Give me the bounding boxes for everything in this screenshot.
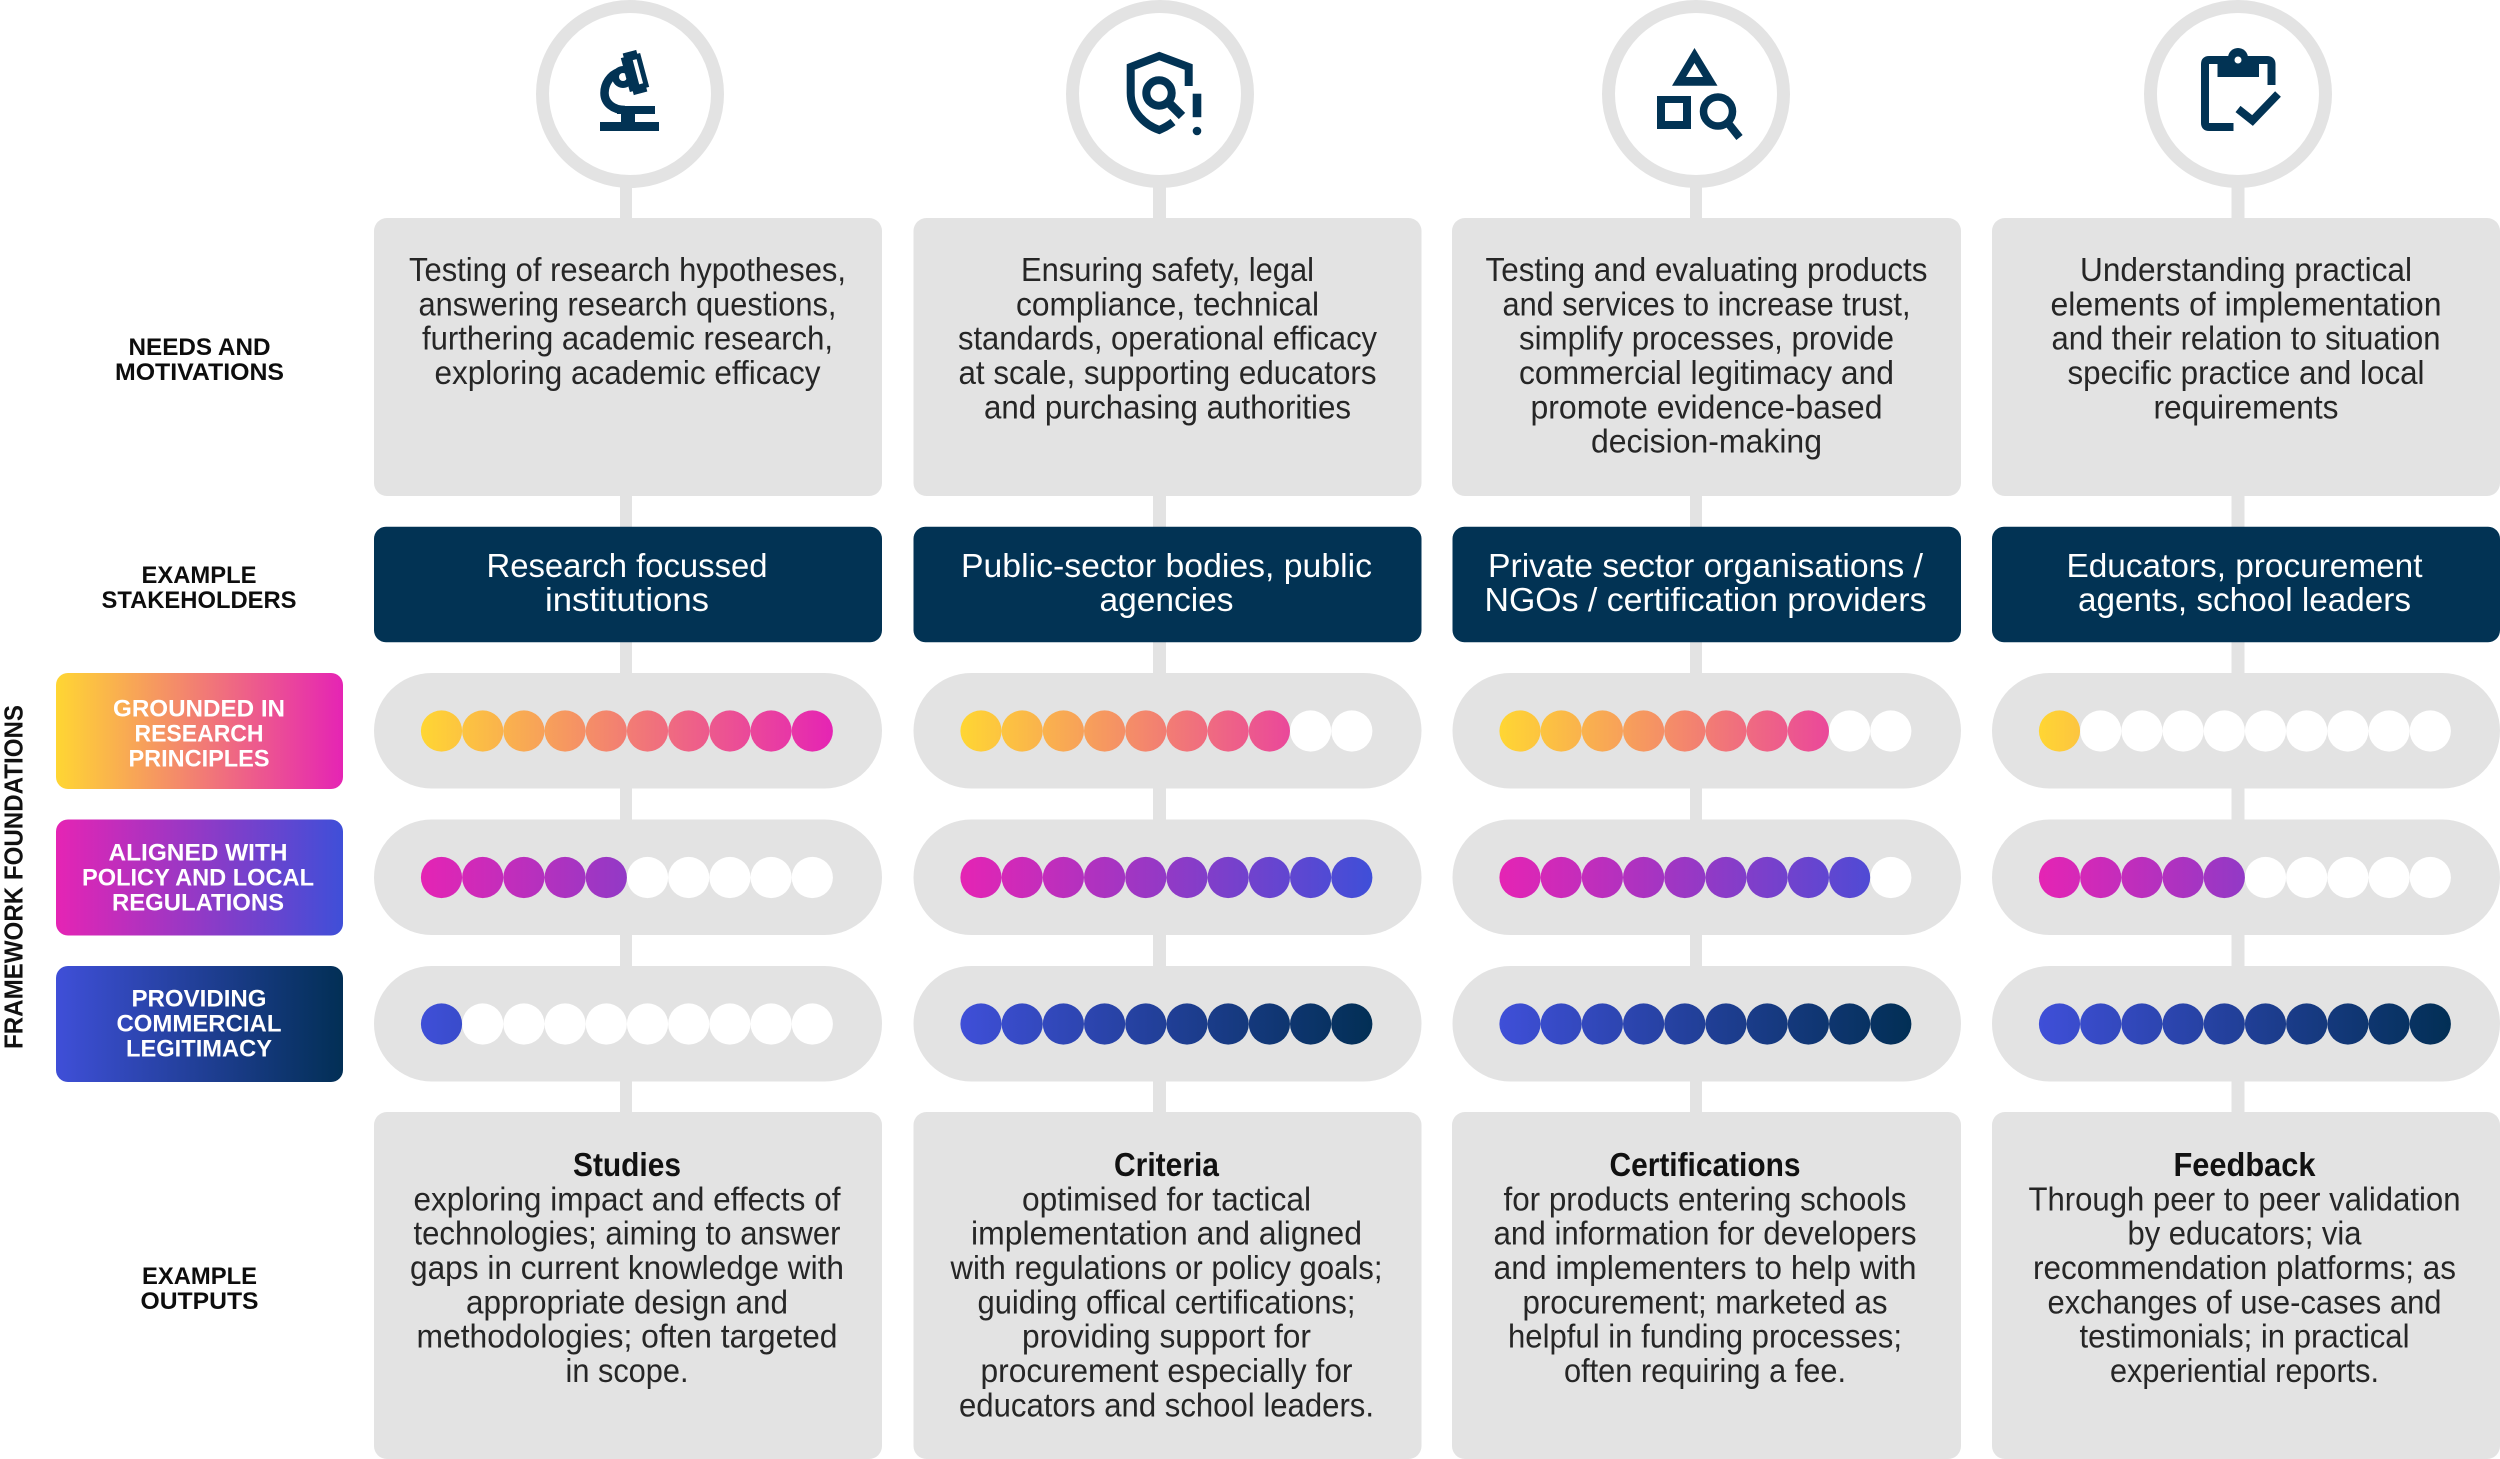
foundation label: commercial legitimacy: PROVIDING [132, 986, 266, 1013]
panel: needs educators: Understanding practical [2080, 251, 2412, 288]
panel: output studies: methodologies; often targeted [416, 1318, 838, 1355]
rating pill: private sector, policy 9 of 10 [1452, 820, 1961, 935]
panel: needs research [374, 218, 882, 496]
panel: needs public sector: Ensuring safety, legal [1021, 251, 1314, 288]
row label: example outputs: OUTPUTS [140, 1288, 258, 1315]
panel: needs educators: specific practice and local [2068, 354, 2424, 391]
row label: example stakeholders [102, 562, 296, 614]
panel: needs private sector: decision-making [1591, 423, 1822, 460]
foundation label: commercial legitimacy: LEGITIMACY [126, 1035, 272, 1062]
panel: output criteria: educators and school leaders. [959, 1386, 1374, 1423]
panel: output criteria: providing support for [1022, 1318, 1311, 1355]
foundation label: aligned with policy [56, 820, 343, 936]
rating pill: research, policy 5 of 10 [374, 820, 882, 935]
foundation label: commercial legitimacy [56, 966, 343, 1082]
panel: output certifications: and information for developers [1494, 1215, 1916, 1252]
panel: output feedback: recommendation platforms; as [2033, 1249, 2456, 1286]
foundation label: aligned with policy: ALIGNED WITH [108, 840, 288, 867]
panel: output criteria: implementation and aligned [971, 1215, 1362, 1252]
rating pill: private sector, commercial 10 of 10 [1452, 966, 1961, 1082]
panel: output criteria: with regulations or policy goals; [950, 1249, 1382, 1286]
stakeholder bar: private sector: NGOs / certification providers [1484, 581, 1926, 618]
stakeholder bar: research [374, 527, 882, 642]
panel: output feedback: Feedback [2174, 1146, 2316, 1183]
panel: output criteria: optimised for tactical [1022, 1180, 1311, 1217]
foundation label: aligned with policy: POLICY AND LOCAL [82, 864, 314, 892]
panel: output certifications: often requiring a fee. [1564, 1352, 1846, 1389]
panel: needs research: furthering academic research, [422, 320, 833, 357]
stakeholder bar: private sector: Private sector organisations / [1488, 547, 1924, 584]
panel: output certifications: procurement; marketed as [1522, 1283, 1888, 1320]
row label: needs and motivations [115, 334, 284, 386]
stakeholder bar: research: institutions [545, 581, 709, 618]
panel: needs private sector: simplify processes, provide [1519, 320, 1894, 357]
icon: shapes and magnifier [1657, 48, 1740, 138]
panel: output studies: in scope. [566, 1352, 688, 1389]
stakeholder bar: public sector: Public-sector bodies, public [961, 547, 1372, 584]
panel: needs private sector [1452, 218, 1961, 496]
icon ring: shapes [1608, 6, 1784, 182]
icon ring: clipboard [2150, 6, 2326, 182]
panel: needs public sector: and purchasing authorities [984, 388, 1351, 425]
stakeholder bar: research: Research focussed [486, 547, 768, 584]
panel: output feedback [1992, 1112, 2500, 1459]
panel: output criteria [914, 1112, 1422, 1459]
foundation label: grounded in research principles: PRINCIPLES [128, 745, 270, 772]
panel: output studies: gaps in current knowledge with [410, 1249, 844, 1286]
panel: output criteria: procurement especially for [980, 1352, 1353, 1389]
rating pill: public sector, commercial 10 of 10 [914, 966, 1422, 1082]
foundation label: aligned with policy: REGULATIONS [112, 889, 284, 916]
stakeholder bar: private sector [1452, 527, 1961, 642]
panel: output studies: appropriate design and [466, 1283, 788, 1320]
stakeholder bar: educators [1992, 527, 2500, 642]
row label: needs and motivations: MOTIVATIONS [115, 359, 284, 386]
panel: needs public sector: at scale, supporting educators [958, 354, 1376, 391]
row label: example stakeholders: EXAMPLE [142, 562, 256, 589]
panel: needs private sector: promote evidence-based [1530, 388, 1882, 425]
rating pill: educators, policy 5 of 10 [1992, 820, 2500, 935]
icon: clipboard with tick [2205, 48, 2278, 127]
panel: needs research: Testing of research hypotheses, [409, 251, 846, 288]
panel: output criteria: guiding offical certifications; [978, 1283, 1356, 1320]
panel: output certifications: helpful in funding processes; [1508, 1318, 1902, 1355]
panel: output studies: exploring impact and effects of [414, 1180, 841, 1217]
rating pill: public sector, principles 8 of 10 [914, 673, 1422, 788]
row label: needs and motivations: NEEDS AND [128, 334, 270, 361]
panel: needs educators: and their relation to situation [2052, 320, 2440, 357]
panel: output studies [374, 1112, 882, 1459]
icon ring: microscope [542, 6, 718, 182]
rating pill: educators, commercial 10 of 10 [1992, 966, 2500, 1082]
panel: needs research: answering research questions, [418, 285, 836, 322]
icon: microscope [600, 49, 659, 131]
row label: example stakeholders: STAKEHOLDERS [102, 587, 296, 614]
panel: output feedback: Through peer to peer validation [2028, 1180, 2460, 1217]
panel: output studies: Studies [573, 1146, 681, 1183]
panel: needs research: exploring academic efficacy [434, 354, 821, 391]
panel: output feedback: experiential reports. [2110, 1352, 2379, 1389]
panel: output feedback: by educators; via [2128, 1215, 2362, 1252]
panel: output criteria: Criteria [1114, 1146, 1220, 1183]
foundation label: commercial legitimacy: COMMERCIAL [116, 1010, 282, 1038]
foundation label: grounded in research principles: GROUNDED IN [113, 696, 285, 723]
panel: output certifications: and implementers to help with [1494, 1249, 1916, 1286]
panel: needs public sector [914, 218, 1422, 496]
panel: needs educators [1992, 218, 2500, 496]
rating pill: research, principles 10 of 10 [374, 673, 882, 788]
foundation label: grounded in research principles [56, 673, 343, 789]
panel: output certifications [1452, 1112, 1961, 1459]
stakeholder bar: educators: Educators, procurement [2066, 547, 2422, 584]
panel: needs private sector: Testing and evaluating products [1486, 251, 1928, 288]
rating pill: educators, principles 1 of 10 [1992, 673, 2500, 788]
row label: example outputs: EXAMPLE [142, 1263, 257, 1290]
panel: output studies: technologies; aiming to answer [414, 1215, 841, 1252]
icon ring: shield [1072, 6, 1248, 182]
panel: output certifications: for products entering schools [1504, 1180, 1906, 1217]
panel: output certifications: Certifications [1610, 1146, 1800, 1183]
rating pill: private sector, principles 8 of 10 [1452, 673, 1961, 788]
panel: needs educators: requirements [2154, 388, 2338, 425]
row label: example outputs [140, 1263, 258, 1315]
panel: needs public sector: standards, operational efficacy [958, 320, 1377, 357]
panel: output feedback: testimonials; in practical [2080, 1318, 2410, 1355]
rating pill: public sector, policy 10 of 10 [914, 820, 1422, 935]
panel: needs public sector: compliance, technical [1016, 285, 1319, 322]
panel: needs private sector: commercial legitimacy and [1519, 354, 1894, 391]
foundation label: grounded in research principles: RESEARCH [134, 720, 264, 748]
panel: needs educators: elements of implementation [2050, 285, 2442, 322]
icon: shield with magnifier and exclamation mark [1131, 56, 1201, 135]
panel: output feedback: exchanges of use-cases and [2048, 1283, 2442, 1320]
stakeholder bar: public sector: agencies [1100, 581, 1234, 618]
rating pill: research, commercial 1 of 10 [374, 966, 882, 1082]
stakeholder bar: public sector [914, 527, 1422, 642]
stakeholder bar: educators: agents, school leaders [2078, 581, 2411, 618]
panel: needs private sector: and services to increase trust, [1502, 285, 1910, 322]
